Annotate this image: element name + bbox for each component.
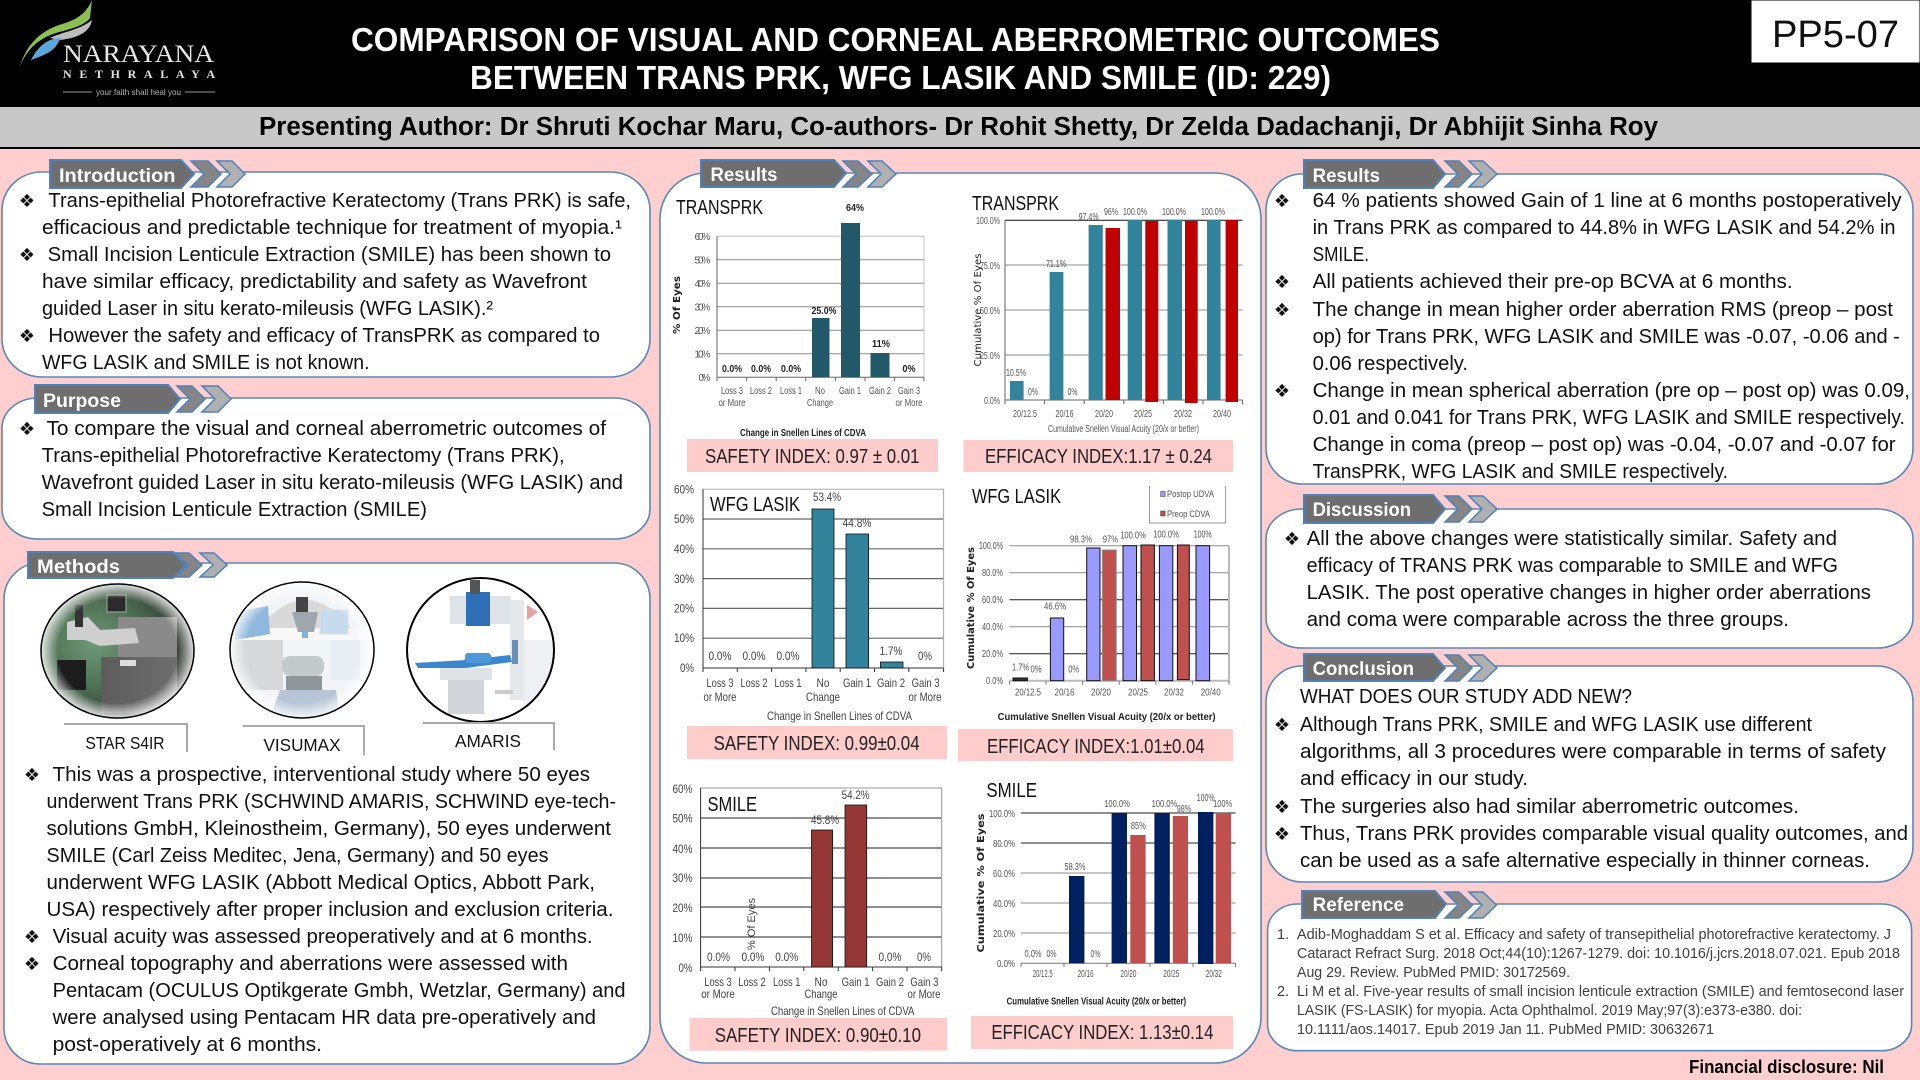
introduction text: have similar efficacy, predictability and safety as Wavefront [42, 271, 587, 293]
chart: TransPRK safety: 0.0% [751, 364, 771, 375]
chart: SMILE safety: 54.2% [842, 788, 870, 802]
chart: WFG LASIK safety: Change in Snellen Lines of CDVA [767, 709, 912, 723]
heading: discussion: Discussion [1313, 500, 1411, 521]
chart: TransPRK safety: % Of Eyes [672, 276, 683, 334]
chart: TransPRK efficacy: 20/32 [1174, 409, 1192, 420]
conclusion text: can be used as a safe alternative especially in thinner corneas. [1300, 850, 1870, 872]
chart: TransPRK efficacy: 100.0% [1201, 207, 1225, 218]
chart: TransPRK safety: Loss 3 [721, 386, 743, 397]
heading: results: Results [710, 165, 778, 186]
callout: WFG LASIK efficacy index [958, 729, 1233, 761]
chart: TransPRK safety: 0% [902, 364, 916, 375]
chart: SMILE efficacy: SMILE [986, 780, 1037, 802]
discussion text: and coma were comparable across the three groups. [1307, 609, 1789, 631]
chart: SMILE safety: or More [701, 987, 735, 1001]
chart: SMILE efficacy: 20/16 [1078, 969, 1094, 980]
chart: TransPRK efficacy: 20/20 [1095, 409, 1113, 420]
chart: TransPRK efficacy [972, 193, 1242, 435]
chart: TransPRK safety: Change [807, 398, 833, 409]
methods text: post-operatively at 6 months. [53, 1034, 322, 1056]
chart: TransPRK efficacy: 20/40 [1213, 409, 1231, 420]
chart: WFG LASIK safety: 0.0% [708, 649, 732, 663]
chart: SMILE safety [672, 782, 942, 1018]
panel: results text [1266, 160, 1913, 484]
panel: introduction [2, 160, 650, 377]
chart: SMILE safety: Loss 3 [704, 975, 732, 989]
chart: SMILE safety: 10% [672, 931, 693, 945]
callout: WFG LASIK safety index: SAFETY INDEX: 0.99±0.04 [714, 733, 920, 755]
chart: SMILE efficacy: 100.0% [1104, 799, 1130, 810]
chart: SMILE safety: 20% [672, 901, 693, 915]
reference list [1277, 927, 1904, 1038]
chart: WFG LASIK efficacy: 97% [1103, 534, 1118, 546]
chart: TransPRK efficacy: 100.0% [1162, 207, 1186, 218]
chart: TransPRK efficacy: 100.0% [976, 216, 1000, 227]
conclusion text: ❖ [1274, 824, 1290, 845]
device photo: VISUMAX [230, 582, 374, 718]
methods text: ❖ [24, 954, 40, 975]
discussion text [1284, 528, 1871, 631]
methods text: This was a prospective, interventional study where 50 eyes [53, 764, 590, 786]
chart: SMILE safety: 40% [672, 842, 693, 856]
chart: WFG LASIK efficacy: 40.0% [982, 622, 1003, 633]
chart: TransPRK efficacy: TRANSPRK [972, 193, 1060, 215]
panel: discussion [1266, 495, 1913, 648]
chart: WFG LASIK efficacy: 20/25 [1128, 688, 1148, 698]
device label: VISUMAX [242, 725, 365, 755]
chart: TransPRK safety: No [815, 386, 825, 397]
chart: TransPRK safety: 40% [694, 279, 711, 290]
header band [0, 0, 1920, 107]
chart: WFG LASIK efficacy: 0% [1068, 664, 1079, 676]
heading: purpose: Purpose [43, 391, 121, 412]
conclusion text: Although Trans PRK, SMILE and WFG LASIK use different [1300, 714, 1812, 736]
chart: TransPRK safety: TRANSPRK [676, 197, 764, 219]
heading: reference [1302, 891, 1496, 918]
callout: TransPRK safety index: SAFETY INDEX: 0.97 ± 0.01 [705, 446, 920, 468]
results text: ❖ [1274, 272, 1290, 293]
chart: SMILE safety: Change in Snellen Lines of CDVA [771, 1004, 914, 1018]
chart: WFG LASIK safety: 0.0% [742, 649, 766, 663]
chart: SMILE efficacy: 0% [1090, 949, 1101, 960]
chart: SMILE safety: or More [908, 987, 941, 1001]
heading: results [1304, 160, 1497, 188]
logo: Narayana Nethralaya: your faith shall heal you [96, 87, 181, 97]
chart: SMILE efficacy: 100.0% [1152, 799, 1177, 810]
chart: TransPRK safety: 10% [694, 350, 711, 360]
chart: TransPRK efficacy: 71.1% [1046, 259, 1066, 270]
methods text: Corneal topography and aberrations were assessed with [53, 953, 568, 975]
conclusion text: ❖ [1274, 797, 1290, 818]
chart: SMILE efficacy: Cumulative Snellen Visual Acuity (20/x or better) [1007, 996, 1186, 1008]
title: COMPARISON OF VISUAL AND CORNEAL ABERROMETRIC OUTCOMES [351, 21, 1440, 58]
discussion text: ❖ [1284, 529, 1300, 550]
chart: TransPRK safety: Gain 3 [898, 386, 920, 397]
chart: WFG LASIK efficacy: 46.6% [1044, 602, 1066, 612]
device label: STAR S4IR [63, 723, 188, 753]
chart: TransPRK efficacy: 100.0% [1123, 207, 1147, 218]
reference list: Aug 29. Review. PubMed PMID: 30172569. [1297, 965, 1570, 981]
chart: WFG LASIK safety: 30% [674, 572, 694, 586]
chart: WFG LASIK efficacy: 98.3% [1070, 534, 1092, 546]
introduction text: Small Incision Lenticule Extraction (SMILE) has been shown to [48, 244, 611, 266]
chart: TransPRK safety: Change in Snellen Lines of CDVA [740, 428, 866, 439]
chart: WFG LASIK efficacy: 20/12.5 [1015, 688, 1041, 698]
reference list: Li M et al. Five-year results of small incision lenticule extraction (SMILE) and femtosecond laser [1297, 984, 1904, 1000]
chart: WFG LASIK safety: or More [704, 690, 737, 704]
heading: conclusion [1304, 654, 1497, 681]
chart: WFG LASIK safety: 50% [674, 512, 694, 526]
chart: TransPRK safety: Loss 1 [780, 386, 802, 397]
callout: WFG LASIK efficacy index: EFFICACY INDEX:1.01±0.04 [987, 736, 1205, 758]
chart: WFG LASIK safety: 10% [674, 631, 694, 645]
chart: TransPRK safety: 20% [694, 326, 711, 337]
device photo: STAR S4IR [41, 584, 194, 718]
chart: SMILE safety: 60% [672, 782, 693, 796]
chart: SMILE efficacy: 98% [1177, 804, 1191, 815]
callout: TransPRK efficacy index [964, 440, 1233, 472]
methods text: Pentacam (OCULUS Optikgerate Gmbh, Wetzlar, Germany) and [53, 980, 626, 1002]
chart: WFG LASIK efficacy: 0% [1030, 664, 1042, 676]
chart: WFG LASIK efficacy: 20/32 [1164, 688, 1184, 698]
chart: SMILE safety: No [814, 975, 828, 989]
results text: 64 % patients showed Gain of 1 line at 6 months postoperatively [1313, 190, 1902, 212]
chart: TransPRK safety: or More [718, 398, 746, 409]
author bar [0, 107, 1920, 149]
results text: 0.01 and 0.041 for Trans PRK, WFG LASIK and SMILE respectively. [1313, 407, 1905, 429]
chart: SMILE safety: 0.0% [775, 950, 798, 964]
purpose text: ❖ [19, 419, 35, 440]
chart: SMILE efficacy: 20/25 [1163, 969, 1180, 980]
chart: SMILE efficacy [976, 780, 1236, 1008]
methods text: underwent Trans PRK (SCHWIND AMARIS, SCHWIND eye-tech- [46, 791, 616, 813]
device label: AMARIS [422, 722, 555, 751]
panel: methods [4, 552, 650, 1064]
introduction text: WFG LASIK and SMILE is not known. [42, 352, 370, 374]
conclusion text: and efficacy in our study. [1300, 768, 1528, 790]
chart: WFG LASIK efficacy: 20/20 [1091, 688, 1111, 698]
chart: TransPRK efficacy: 20/25 [1134, 409, 1152, 420]
reference list: Cataract Refract Surg. 2018 Oct;44(10):1267-1279. doi: 10.1016/j.jcrs.2018.07.021. Epub 2018 [1297, 946, 1900, 962]
chart: WFG LASIK safety: 40% [674, 542, 694, 556]
chart: WFG LASIK efficacy: 20/40 [1201, 688, 1221, 698]
chart: WFG LASIK efficacy: 60.0% [982, 595, 1003, 606]
legend: Postop UDVA [1167, 489, 1215, 500]
purpose text: Trans-epithelial Photorefractive Keratectomy (Trans PRK), [42, 445, 565, 467]
chart: TransPRK safety: 60% [694, 232, 711, 243]
reference list: Adib-Moghaddam S et al. Efficacy and safety of transepithelial photorefractive keratectomy. J [1297, 927, 1891, 943]
chart: SMILE safety: Gain 3 [910, 975, 939, 989]
chart: WFG LASIK safety: Loss 2 [740, 676, 768, 690]
methods text: underwent WFG LASIK (Abbott Medical Optics, Abbott Park, [46, 872, 595, 894]
chart: WFG LASIK safety: 44.8% [842, 516, 872, 530]
callout: TransPRK safety index [687, 439, 938, 472]
heading: results: Results [1313, 166, 1380, 187]
chart: WFG LASIK efficacy: 20.0% [982, 649, 1003, 660]
author bar: Presenting Author: Dr Shruti Kochar Maru, Co-authors- Dr Rohit Shetty, Dr Zelda Dadachanji, Dr Abhijit Sinha Roy [259, 113, 1659, 141]
panel: conclusion [1266, 654, 1913, 882]
chart: WFG LASIK safety: Gain 3 [912, 676, 940, 690]
panel: results charts [660, 160, 1261, 1063]
results text: The change in mean higher order aberration RMS (preop – post [1313, 299, 1893, 321]
heading: discussion [1304, 495, 1497, 523]
callout: SMILE safety index [690, 1018, 947, 1051]
chart: TransPRK safety: 30% [694, 302, 711, 314]
results text [1274, 190, 1910, 483]
methods text: ❖ [24, 927, 40, 948]
chart: SMILE safety: Loss 1 [773, 975, 801, 989]
chart: WFG LASIK safety: Gain 1 [843, 676, 871, 690]
conclusion text: ❖ [1274, 715, 1290, 736]
methods text: solutions GmbH, Kleinostheim, Germany), 50 eyes underwent [46, 818, 611, 840]
chart: WFG LASIK safety: Gain 2 [877, 676, 905, 690]
chart: SMILE safety: Gain 1 [842, 975, 870, 989]
chart: SMILE efficacy: 20/20 [1120, 969, 1137, 980]
chart: TransPRK efficacy: 20/16 [1056, 409, 1074, 420]
chart: SMILE safety: 45.8% [811, 813, 839, 827]
chart: WFG LASIK efficacy: 100.0% [1120, 530, 1146, 542]
introduction text: efficacious and predictable technique for treatment of myopia.¹ [42, 217, 622, 239]
heading: methods [28, 552, 227, 578]
introduction text: guided Laser in situ kerato-mileusis (WFG LASIK).² [42, 298, 493, 320]
device photo: AMARIS [407, 578, 554, 722]
chart: TransPRK efficacy: 10.5% [1006, 368, 1026, 379]
chart: WFG LASIK efficacy: 80.0% [982, 568, 1003, 579]
heading: methods: Methods [37, 557, 120, 578]
conclusion text: Thus, Trans PRK provides comparable visual quality outcomes, and [1300, 823, 1908, 845]
chart: WFG LASIK safety: No [816, 676, 830, 690]
chart: SMILE safety: 30% [672, 871, 693, 885]
chart: WFG LASIK efficacy: Cumulative Snellen Visual Acuity (20/x or better) [998, 712, 1216, 723]
discussion text: efficacy of TRANS PRK was comparable to SMILE and WFG [1307, 555, 1838, 577]
chart: SMILE safety: 0% [917, 950, 931, 964]
logo: Narayana Nethralaya: NETHRALAYA [63, 67, 215, 81]
purpose text: To compare the visual and corneal aberrometric outcomes of [46, 418, 606, 440]
chart: TransPRK safety: 11% [872, 339, 890, 350]
heading: introduction: Introduction [59, 166, 176, 187]
chart: TransPRK safety: 64% [846, 203, 864, 214]
chart: SMILE efficacy: 100% [1213, 799, 1232, 810]
results text: in Trans PRK as compared to 44.8% in WFG LASIK and 54.2% in [1313, 217, 1896, 239]
methods text [24, 764, 626, 1056]
chart: WFG LASIK efficacy: 0.0% [986, 676, 1003, 687]
results text: SMILE. [1313, 244, 1369, 266]
chart: SMILE safety: 0% [678, 961, 693, 975]
chart: WFG LASIK safety: 1.7% [880, 644, 903, 658]
chart: TransPRK efficacy: 97.4% [1079, 212, 1099, 223]
chart: TransPRK safety [672, 197, 924, 439]
chart: WFG LASIK safety: 60% [674, 482, 694, 496]
heading: introduction [50, 160, 245, 188]
heading: reference: Reference [1313, 895, 1404, 916]
chart: TransPRK efficacy: 25.0% [980, 351, 1000, 362]
chart: WFG LASIK safety: WFG LASIK [710, 494, 801, 516]
chart: WFG LASIK safety: 0% [918, 649, 932, 663]
results text: ❖ [1274, 381, 1290, 402]
conclusion text: algorithms, all 3 procedures were comparable in terms of safety [1300, 741, 1886, 763]
logo: Narayana Nethralaya [20, 0, 215, 97]
callout: WFG LASIK safety index [687, 726, 947, 759]
financial disclosure: Financial disclosure: Nil [1689, 1057, 1884, 1077]
results text: 0.06 respectively. [1313, 353, 1468, 375]
chart: SMILE safety: Loss 2 [738, 975, 766, 989]
results text: Change in coma (preop – post op) was -0.04, -0.07 and -0.07 for [1313, 434, 1896, 456]
chart: SMILE safety: Gain 2 [876, 975, 904, 989]
chart: TransPRK efficacy: Cumulative Snellen Visual Acuity (20/x or better) [1048, 424, 1199, 435]
purpose text [19, 418, 623, 521]
chart: WFG LASIK efficacy [966, 486, 1229, 723]
chart: SMILE efficacy: 40.0% [993, 899, 1015, 910]
chart: TransPRK safety: 0% [698, 373, 711, 384]
conclusion text: WHAT DOES OUR STUDY ADD NEW? [1300, 686, 1632, 708]
chart: TransPRK safety: Loss 2 [750, 386, 772, 397]
chart: SMILE safety: 0.0% [878, 950, 902, 964]
methods text: USA) respectively after proper inclusion and exclusion criteria. [46, 899, 614, 921]
chart: WFG LASIK safety: 20% [674, 602, 694, 616]
chart: SMILE efficacy: Cumulative % Of Eyes [976, 813, 987, 952]
purpose text: Wavefront guided Laser in situ kerato-mileusis (WFG LASIK) and [42, 472, 623, 494]
introduction text: Trans-epithelial Photorefractive Keratectomy (Trans PRK) is safe, [48, 190, 631, 212]
chart: TransPRK efficacy: 75.0% [980, 261, 1000, 272]
methods text: were analysed using Pentacam HR data pre-operatively and [52, 1007, 596, 1029]
introduction text [19, 190, 631, 374]
poster id box: PP5-07 [1772, 14, 1899, 56]
chart: WFG LASIK efficacy: WFG LASIK [972, 486, 1062, 508]
poster id box [1751, 0, 1920, 63]
results text: TransPRK, WFG LASIK and SMILE respectively. [1313, 461, 1728, 483]
chart: WFG LASIK efficacy: Cumulative % Of Eyes [966, 547, 977, 669]
purpose text: Small Incision Lenticule Extraction (SMILE) [42, 499, 427, 521]
chart: WFG LASIK efficacy: 100% [1194, 530, 1212, 540]
chart: SMILE efficacy: 85% [1131, 821, 1146, 832]
discussion text: All the above changes were statistically similar. Safety and [1307, 528, 1837, 550]
chart: SMILE safety: Change [804, 987, 838, 1001]
chart: SMILE efficacy: 80.0% [993, 839, 1015, 850]
results text: ❖ [1274, 300, 1290, 321]
chart: SMILE safety: % Of Eyes [746, 898, 758, 950]
chart: TransPRK safety: Gain 2 [869, 386, 891, 397]
chart: SMILE efficacy: 0% [1046, 949, 1057, 960]
chart: SMILE efficacy: 0.0% [1024, 949, 1042, 960]
results text: op) for Trans PRK, WFG LASIK and SMILE was -0.07, -0.06 and - [1313, 326, 1900, 348]
chart: WFG LASIK efficacy: 100.0% [1153, 530, 1179, 540]
chart: TransPRK efficacy: 0% [1068, 387, 1078, 398]
chart: SMILE safety: 0.0% [707, 950, 730, 964]
chart: TransPRK safety: 0.0% [781, 364, 801, 375]
results text: Change in mean spherical aberration (pre op – post op) was 0.09, [1313, 380, 1910, 402]
chart: SMILE safety: 0.0% [742, 950, 765, 964]
chart: TransPRK safety: 0.0% [722, 364, 742, 375]
device label: AMARIS: AMARIS [455, 731, 521, 751]
reference list: 10.1111/aos.14017. Epub 2019 Jan 11. PubMed PMID: 30632671 [1297, 1022, 1714, 1038]
chart: TransPRK efficacy: 20/12.5 [1013, 409, 1037, 420]
discussion text: LASIK. The post operative changes in higher order aberrations [1307, 582, 1871, 604]
callout: SMILE safety index: SAFETY INDEX: 0.90±0.10 [715, 1025, 921, 1047]
chart: WFG LASIK safety [674, 482, 944, 723]
chart: TransPRK safety: Gain 1 [839, 386, 861, 397]
reference list: 1. [1277, 927, 1289, 943]
chart: SMILE safety: SMILE [708, 794, 757, 816]
introduction text: ❖ [19, 245, 35, 266]
chart: TransPRK safety: or More [896, 398, 923, 409]
chart: TransPRK safety: 50% [694, 256, 711, 266]
chart: SMILE efficacy: 100.0% [989, 809, 1015, 820]
chart: TransPRK efficacy: Cumulative % Of Eyes [973, 253, 984, 367]
panel: reference [1268, 891, 1912, 1051]
chart: SMILE efficacy: 60.0% [993, 869, 1015, 880]
chart: WFG LASIK safety: Loss 3 [706, 676, 734, 690]
title: BETWEEN TRANS PRK, WFG LASIK AND SMILE (ID: 229) [470, 59, 1331, 96]
results text: All patients achieved their pre-op BCVA at 6 months. [1313, 271, 1793, 293]
chart: SMILE efficacy: 58.3% [1064, 862, 1086, 873]
chart: WFG LASIK safety: 0.0% [776, 649, 800, 663]
chart: WFG LASIK efficacy: 1.7% [1012, 662, 1029, 674]
callout: TransPRK efficacy index: EFFICACY INDEX:1.17 ± 0.24 [985, 446, 1212, 468]
chart: TransPRK efficacy: 50.0% [980, 306, 1000, 317]
chart: TransPRK safety: 25.0% [812, 306, 837, 317]
chart: TransPRK efficacy: 96% [1104, 207, 1118, 218]
conclusion text: The surgeries also had similar aberrometric outcomes. [1300, 796, 1799, 818]
chart: SMILE efficacy: 20/12.5 [1033, 969, 1053, 980]
callout: SMILE efficacy index: EFFICACY INDEX: 1.13±0.14 [991, 1022, 1213, 1044]
panel: purpose [2, 385, 650, 539]
callout: SMILE efficacy index [971, 1016, 1233, 1049]
reference list: 2. [1277, 984, 1289, 1000]
chart: SMILE safety: 50% [672, 812, 693, 826]
chart: WFG LASIK safety: Change [806, 690, 840, 704]
chart: WFG LASIK safety: or More [908, 690, 942, 704]
chart: WFG LASIK efficacy: 20/16 [1054, 688, 1075, 698]
results text: ❖ [1274, 191, 1290, 212]
methods text: ❖ [24, 765, 40, 786]
chart: TransPRK efficacy: 0% [1028, 387, 1038, 398]
chart: SMILE efficacy: 20.0% [993, 929, 1015, 940]
chart: WFG LASIK safety: Loss 1 [774, 676, 802, 690]
chart: SMILE efficacy: 0.0% [997, 959, 1015, 970]
heading: conclusion: Conclusion [1313, 659, 1414, 680]
conclusion text [1274, 686, 1908, 872]
chart: SMILE efficacy: 100% [1197, 793, 1215, 804]
device label: STAR S4IR: STAR S4IR [86, 733, 164, 753]
legend: Preop CDVA [1167, 509, 1211, 520]
chart: TransPRK efficacy: 0.0% [984, 396, 1000, 407]
title [351, 21, 1440, 96]
introduction text: ❖ [19, 326, 35, 347]
heading: results [701, 160, 896, 187]
introduction text: However the safety and efficacy of TransPRK as compared to [48, 325, 600, 347]
chart: SMILE efficacy: 20/32 [1206, 969, 1222, 980]
chart: WFG LASIK safety: 53.4% [813, 490, 841, 504]
introduction text: ❖ [19, 191, 35, 212]
methods text: Visual acuity was assessed preoperatively and at 6 months. [53, 926, 593, 948]
methods text: SMILE (Carl Zeiss Meditec, Jena, Germany) and 50 eyes [46, 845, 548, 867]
logo: Narayana Nethralaya: NARAYANA [63, 41, 214, 68]
legend [1150, 486, 1226, 523]
chart: WFG LASIK safety: 0% [680, 661, 694, 675]
chart: WFG LASIK efficacy: 100.0% [979, 541, 1003, 552]
reference list: LASIK (FS-LASIK) for myopia. Acta Ophthalmol. 2019 May;97(3):e373-e380. doi: [1297, 1003, 1802, 1019]
heading: purpose [35, 385, 231, 413]
device label: VISUMAX: VISUMAX [264, 735, 341, 755]
